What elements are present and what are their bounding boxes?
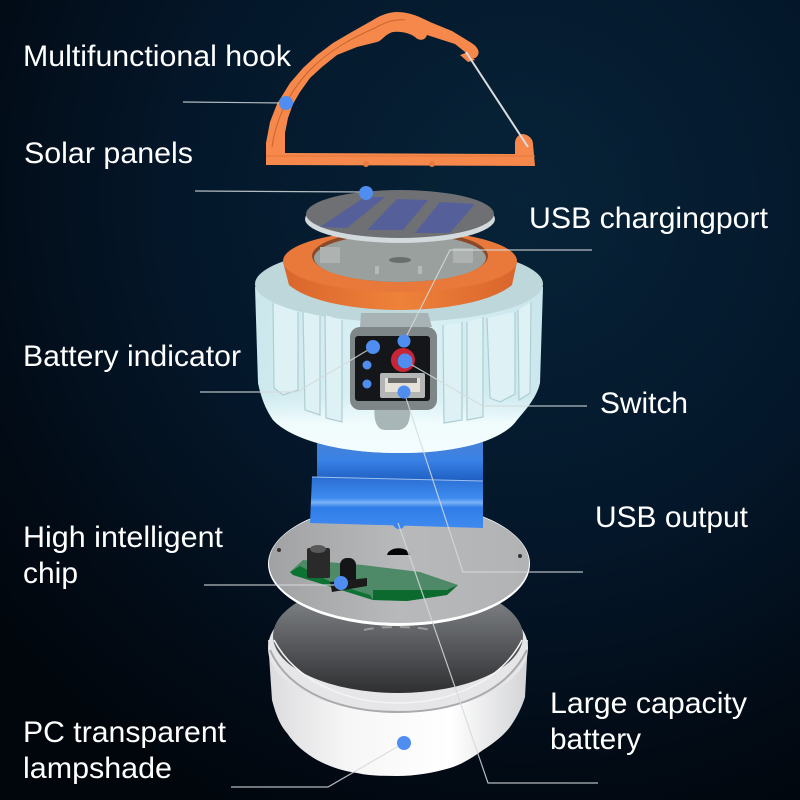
battery [310,438,483,529]
circuit board [290,560,458,601]
control panel [350,313,437,430]
label: high intelligent chip [23,521,224,590]
usb port [380,373,425,398]
label: pc transparent lampshade: lampshade [23,752,172,785]
hook prong [460,52,475,62]
label: solar panels: Solar panels [24,137,193,170]
label: switch: Switch [600,387,688,420]
connectors [307,548,330,578]
label: pc transparent lampshade [23,716,227,785]
label: pc transparent lampshade: PC transparent [23,716,227,749]
solar panel [305,190,495,243]
switch [391,348,415,372]
label: large capacity battery [550,687,747,756]
body ribs [273,302,531,423]
multifunctional hook [266,12,535,167]
label: high intelligent chip: chip [23,557,78,590]
leader lines [183,102,598,787]
label: large capacity battery: Large capacity [550,687,747,720]
label: usb charging port: USB chargingport [529,202,769,235]
label: battery indicator: Battery indicator [23,340,241,373]
lamp body [255,230,543,453]
label: usb output: USB output [595,501,749,534]
orange ring [283,230,517,310]
marker dots [279,96,412,750]
pcb disk [268,502,530,626]
label: large capacity battery: battery [550,723,641,756]
lampshade [268,579,528,776]
label: high intelligent chip: High intelligent [23,521,224,554]
label: multifunctional hook: Multifunctional hook [23,40,292,73]
